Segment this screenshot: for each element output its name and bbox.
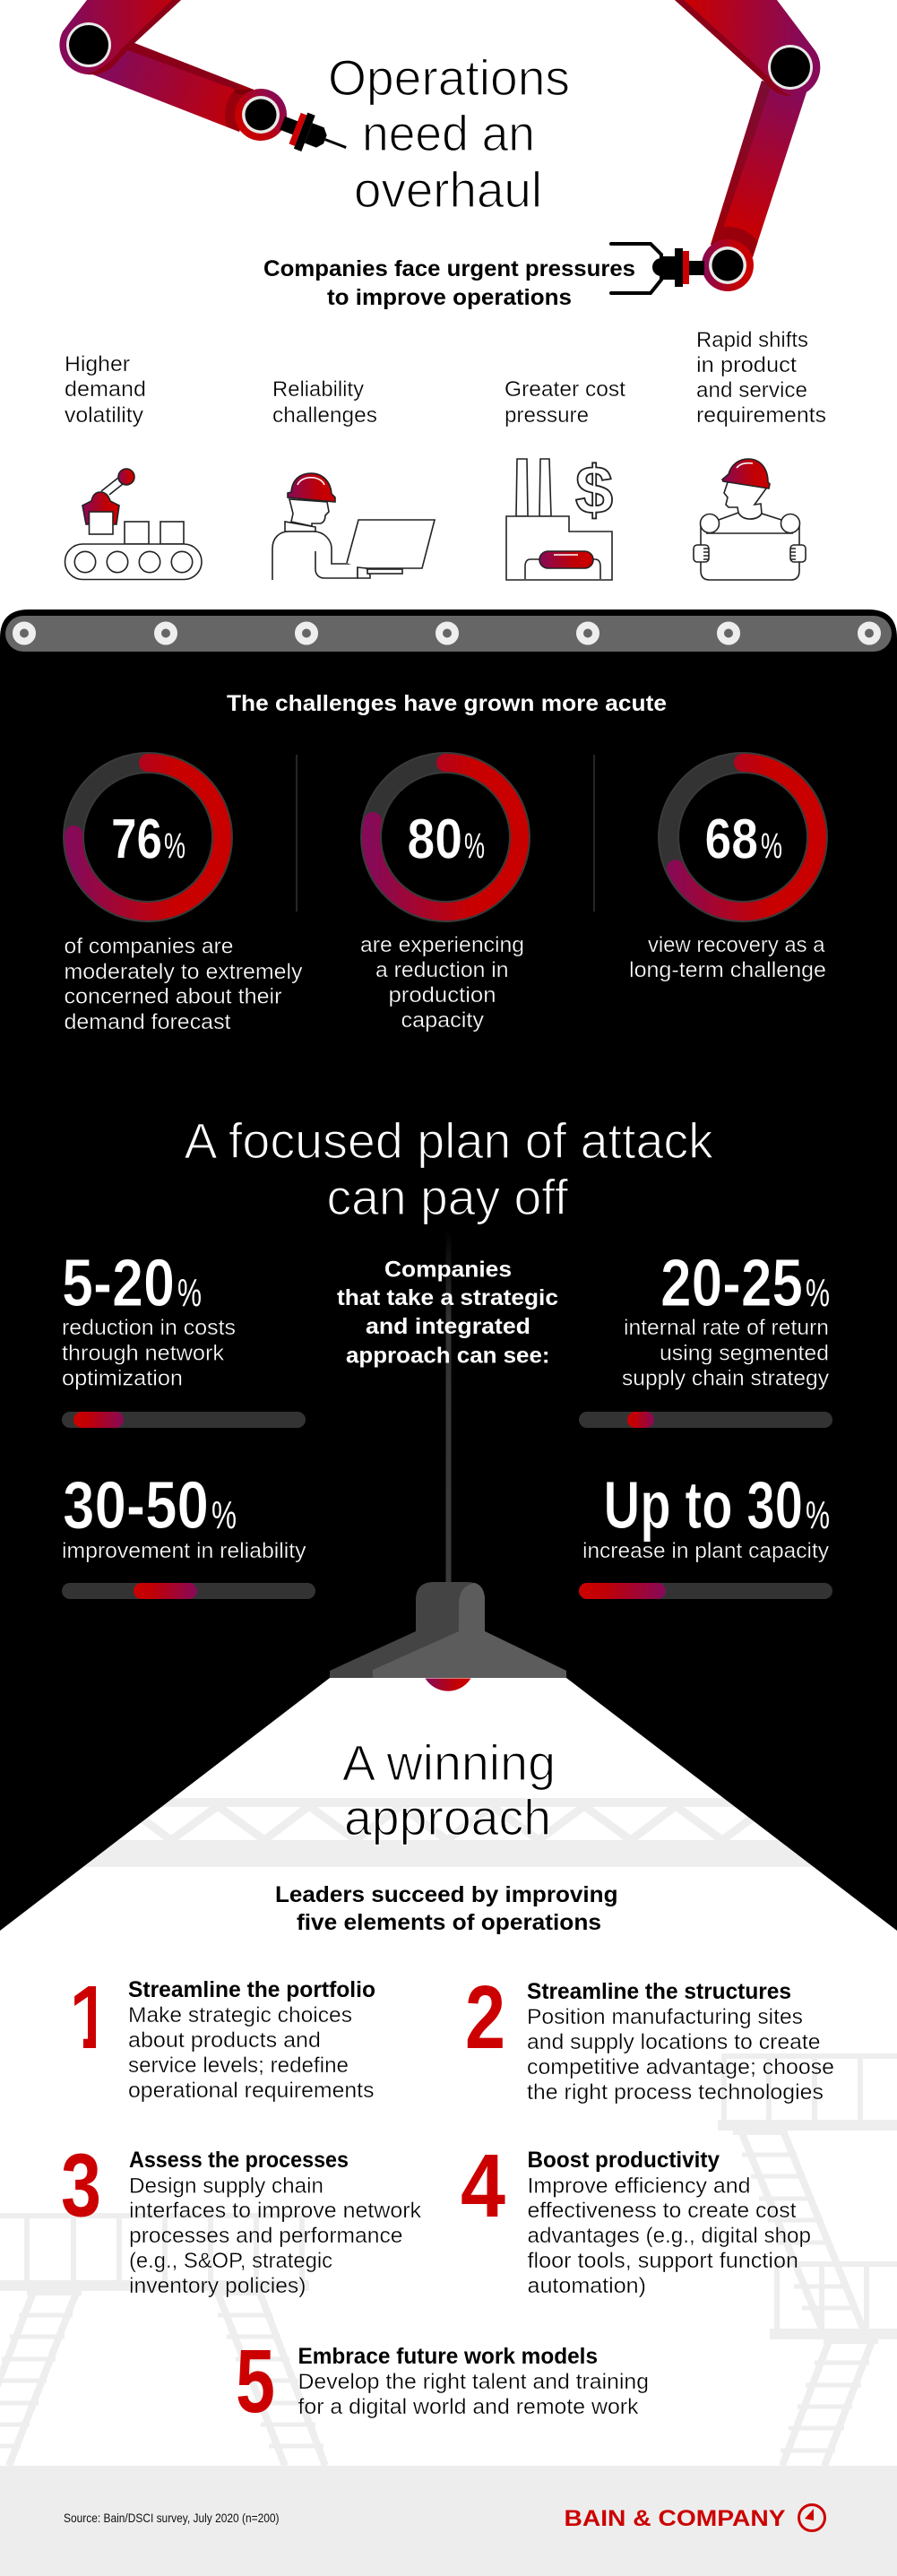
stat: up to 30% — [582, 1467, 830, 1563]
subtitle — [263, 256, 635, 310]
center text: companies: and integrated — [366, 1314, 530, 1339]
bar 5-20% — [62, 1412, 306, 1428]
stat: 20-25%: using segmented — [660, 1341, 829, 1366]
stat: 5-20%: 5-20 — [62, 1245, 175, 1320]
belt rivets — [16, 626, 877, 642]
icon: conveyor with robot arm — [65, 469, 202, 579]
label: higher demand volatility — [65, 352, 146, 428]
icon: factory with dollar sign — [506, 453, 613, 580]
subheading: leaders: five elements of operations — [297, 1910, 601, 1935]
donut 80%: 80 — [407, 808, 462, 871]
donut 68%: 68 — [704, 808, 758, 871]
element 1: Make strategic choices — [128, 2003, 352, 2027]
caption 80%: are experiencing — [360, 933, 524, 957]
conveyor belt header — [5, 616, 892, 652]
element 5: Embrace future work models — [298, 2344, 598, 2369]
element 5: for a digital world and remote work — [298, 2395, 640, 2419]
center text: companies: that take a strategic — [337, 1285, 558, 1310]
subtitle: Companies face urgent pressures — [263, 256, 635, 281]
caption 68%: view recovery as a — [648, 933, 825, 957]
title: need an — [362, 105, 535, 161]
element 5: 5 — [236, 2331, 275, 2432]
bar 30-50% — [62, 1583, 315, 1599]
label: greater cost pressure — [505, 377, 625, 428]
label: rapid shifts: in product — [696, 353, 797, 377]
element 1: operational requirements — [128, 2079, 375, 2103]
element 5 — [236, 2331, 649, 2432]
heading: focused plan: can pay off — [326, 1169, 568, 1225]
stat: up to 30%: increase in plant capacity — [582, 1539, 829, 1563]
center text: companies — [337, 1257, 558, 1368]
element 3: (e.g., S&OP, strategic — [129, 2249, 332, 2273]
label: reliability challenges: challenges — [272, 403, 377, 428]
subheading: leaders: Leaders succeed by improving — [275, 1882, 618, 1907]
title: overhaul — [354, 161, 542, 218]
stat: 30-50% — [62, 1467, 306, 1563]
element 1: 1 — [69, 1967, 114, 2068]
stat: up to 30%: Up to 30 — [604, 1467, 803, 1543]
element 2: competitive advantage; choose — [527, 2055, 834, 2079]
element 2: and supply locations to create — [527, 2030, 821, 2054]
stat: 30-50%: improvement in reliability — [62, 1539, 306, 1563]
stat: 20-25% — [622, 1245, 830, 1391]
dividers — [297, 755, 594, 912]
source note: Source: Bain/DSCI survey, July 2020 (n=200) — [64, 2511, 280, 2525]
stat: up to 30%: % — [806, 1493, 830, 1537]
black panel with light cone cut-out — [0, 609, 897, 1931]
robot arm right — [611, 0, 820, 304]
element 3: processes and performance — [129, 2224, 403, 2248]
heading: winning approach — [342, 1734, 556, 1846]
heading: winning approach: A winning — [342, 1734, 556, 1791]
element 2: 2 — [465, 1967, 505, 2068]
caption 80%: production — [389, 983, 496, 1007]
heading: focused plan — [185, 1112, 714, 1225]
element 4: Boost productivity — [527, 2148, 720, 2173]
element 4: 4 — [461, 2136, 505, 2236]
title: Operations — [328, 49, 570, 106]
donut 80% — [371, 763, 520, 912]
icon: worker at laptop — [272, 473, 435, 580]
element 3: 3 — [61, 2135, 101, 2235]
element 3: Assess the processes — [129, 2148, 349, 2173]
caption 76%: demand forecast — [65, 1010, 231, 1034]
element 5: Develop the right talent and training — [298, 2370, 649, 2394]
caption 80%: a reduction in — [375, 958, 509, 982]
stat: 5-20%: optimization — [62, 1366, 183, 1391]
label: higher demand volatility: demand — [65, 377, 146, 402]
element 2: Position manufacturing sites — [527, 2005, 803, 2029]
truss behind light cone — [0, 1798, 897, 1867]
element 4: advantages (e.g., digital shop — [527, 2224, 811, 2248]
stat: 20-25%: 20-25 — [660, 1245, 803, 1320]
label: rapid shifts — [696, 328, 826, 428]
gripper on right arm — [611, 244, 704, 293]
label: greater cost pressure: Greater cost — [505, 377, 625, 402]
element 4: automation) — [527, 2274, 646, 2298]
caption 80% — [360, 933, 524, 1033]
title — [328, 49, 570, 218]
donut 76% — [73, 763, 222, 912]
label: rapid shifts: Rapid shifts — [696, 328, 808, 352]
element 1: about products and — [128, 2028, 321, 2053]
element 2: the right process technologies — [527, 2080, 824, 2105]
stat: 30-50%: 30-50 — [63, 1467, 209, 1543]
caption 76%: concerned about their — [65, 984, 281, 1009]
lamp cord — [446, 1230, 452, 1584]
element 4 — [461, 2136, 811, 2298]
footer band — [0, 2466, 897, 2576]
element 3: inventory policies) — [129, 2274, 306, 2298]
caption 80%: capacity — [401, 1008, 484, 1033]
tool on left arm — [275, 106, 353, 166]
element 4: Improve efficiency and — [527, 2174, 751, 2198]
stat: 5-20% — [62, 1245, 236, 1391]
bar 20-25% — [579, 1412, 832, 1428]
logo: Bain & Company: BAIN & COMPANY — [565, 2506, 786, 2531]
caption 68%: long-term challenge — [629, 958, 826, 982]
element 2: Streamline the structures — [527, 1979, 791, 2004]
donut 76%: 76 — [111, 808, 162, 871]
element 3: interfaces to improve network — [129, 2199, 422, 2223]
icon: factory with dollar sign: $ — [575, 453, 613, 529]
stat: 5-20%: reduction in costs — [62, 1316, 236, 1340]
label: greater cost pressure: pressure — [505, 403, 589, 428]
subtitle: to improve operations — [327, 285, 572, 310]
label: rapid shifts: requirements — [696, 403, 826, 428]
element 1: Streamline the portfolio — [128, 1977, 375, 2002]
stat: 30-50%: % — [211, 1493, 237, 1537]
element 3 — [61, 2135, 422, 2298]
subheading: leaders — [275, 1882, 618, 1935]
donut 80%: % — [464, 826, 485, 866]
stat: 20-25%: internal rate of return — [624, 1316, 829, 1340]
donut 76%: % — [164, 826, 185, 866]
donut 68%: % — [761, 826, 782, 866]
label: rapid shifts: and service — [696, 378, 807, 402]
stat: 20-25%: supply chain strategy — [622, 1366, 829, 1391]
center text: companies: Companies — [384, 1257, 512, 1282]
heading: challenges: The challenges have grown more acute — [227, 691, 667, 716]
lamp bulb — [425, 1678, 471, 1691]
center text: companies: approach can see: — [346, 1343, 550, 1368]
element 1 — [74, 1981, 375, 2102]
scaffold background illustration — [0, 2053, 897, 2466]
stat: 5-20%: % — [177, 1271, 202, 1315]
element 4: floor tools, support function — [527, 2249, 798, 2273]
heading: winning approach: approach — [344, 1789, 551, 1846]
donut 68% — [668, 763, 817, 912]
element 4: effectiveness to create cost — [527, 2199, 797, 2223]
heading: focused plan: A focused plan of attack — [185, 1112, 714, 1169]
stat: 20-25%: % — [806, 1271, 830, 1315]
label: reliability challenges: Reliability — [272, 377, 364, 402]
icon: worker holding board — [694, 459, 806, 580]
caption 76% — [65, 934, 303, 1034]
label: reliability challenges — [272, 377, 377, 428]
bar up to 30% — [579, 1583, 832, 1599]
robot arm left — [59, 0, 347, 151]
element 1: service levels; redefine — [128, 2053, 349, 2078]
caption 68% — [629, 933, 826, 982]
caption 76%: of companies are — [65, 934, 233, 959]
element 3: Design supply chain — [129, 2174, 323, 2198]
lamp — [330, 1582, 566, 1691]
caption 76%: moderately to extremely — [65, 960, 303, 984]
label: higher demand volatility: Higher — [65, 352, 130, 376]
label: higher demand volatility: volatility — [65, 403, 143, 428]
stat: 5-20%: through network — [62, 1341, 225, 1366]
element 2 — [465, 1967, 834, 2105]
